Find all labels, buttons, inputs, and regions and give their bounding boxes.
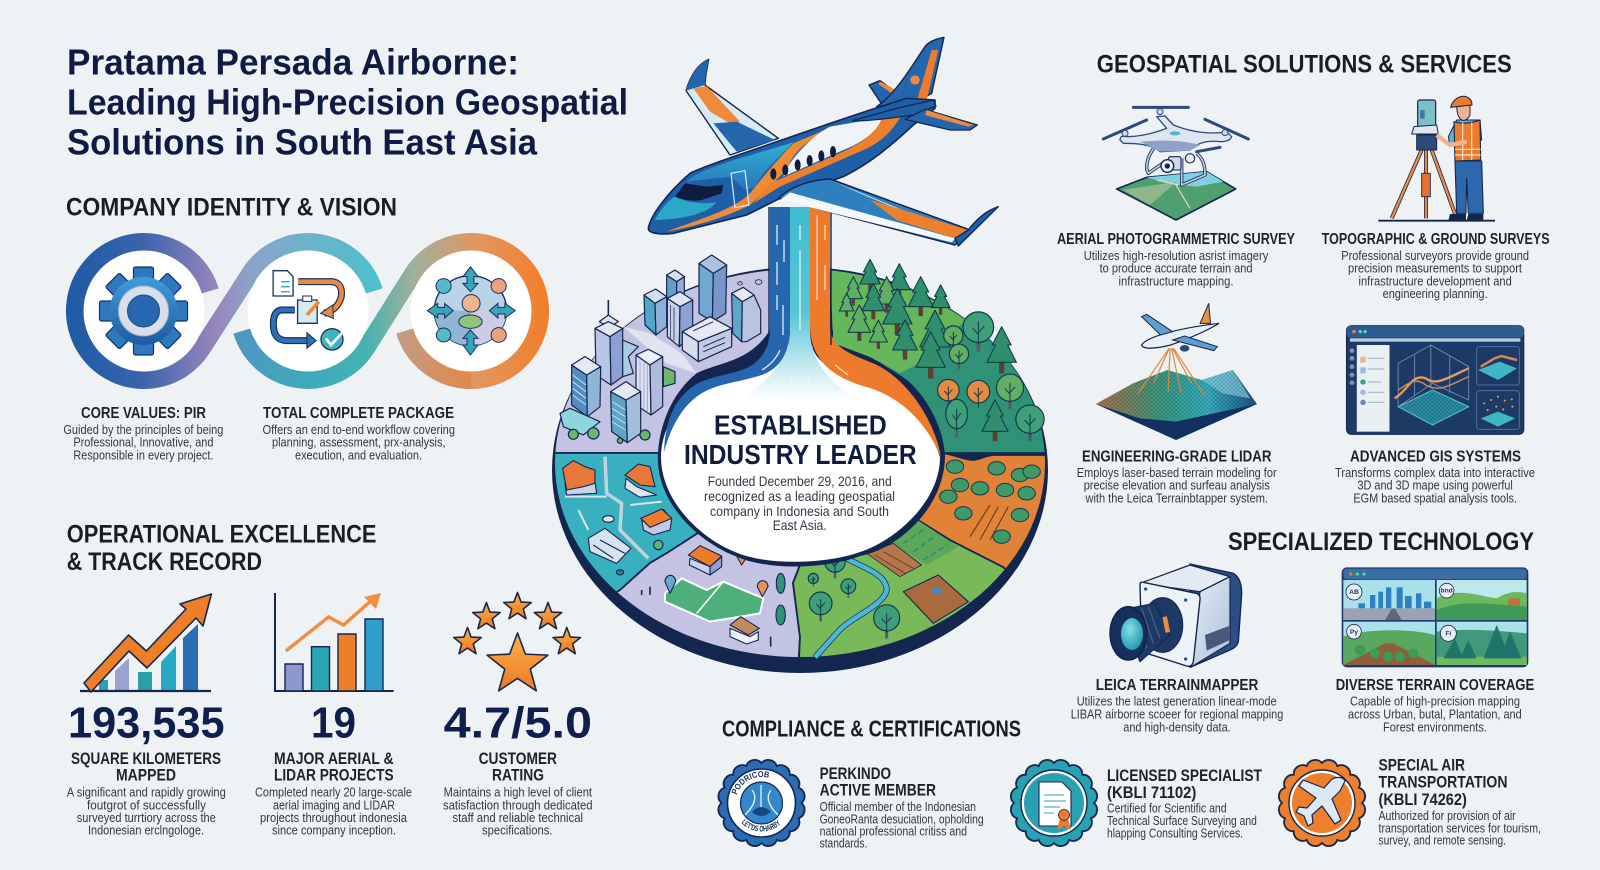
badge: special air transportation <box>1279 760 1365 846</box>
icon: four terrain scenes: AB <box>1349 589 1359 596</box>
text: established industry leader: East Asia. <box>773 517 827 533</box>
stat: customer rating: satisfaction through dedicated <box>443 798 593 812</box>
text: engineering lidar: Employs laser-based terrain modeling for <box>1077 466 1277 480</box>
stat: customer rating: RATING <box>492 766 544 785</box>
stat: square kilometers <box>67 698 226 838</box>
stat: square kilometers: surveyed turrtiory across the <box>77 811 216 825</box>
panel: company identity and vision <box>63 194 540 462</box>
stat: customer rating <box>443 698 593 838</box>
text: established industry leader <box>684 410 917 533</box>
text: established industry leader: company in Indonesia and South <box>710 503 889 519</box>
text: special air transportation: (KBLI 74262) <box>1378 790 1467 809</box>
icon: four terrain scenes <box>1342 567 1528 667</box>
text: engineering lidar: precise elevation and surfeau analysis <box>1084 479 1270 493</box>
text: leica terrainmapper: LEICA TERRAINMAPPER <box>1096 677 1259 694</box>
text: licensed specialist: Technical Surface Surveying and <box>1107 814 1257 828</box>
text: topographic surveys: precision measurements to support <box>1348 262 1522 276</box>
text: diverse terrain: Forest environments. <box>1383 721 1487 735</box>
text: licensed specialist: Certified for Scientific and <box>1107 802 1227 816</box>
panel: specialized technology <box>1071 528 1535 735</box>
text: established industry leader: INDUSTRY LEADER <box>684 439 917 470</box>
text: aerial photogrammetric <box>1057 231 1295 288</box>
panel: operational excellence <box>67 520 593 838</box>
text: licensed specialist: (KBLI 71102) <box>1107 783 1196 802</box>
stat: square kilometers: Indonesian erclngologe. <box>88 824 204 838</box>
stat: square kilometers: A significant and rapidly growing <box>67 786 226 800</box>
text: perkindo <box>820 764 984 851</box>
text: aerial photogrammetric: Utilizes high-resolution asrist imagery <box>1084 249 1269 263</box>
badge: perkindo <box>718 759 806 847</box>
icon: four terrain scenes: bnd <box>1441 588 1453 595</box>
stat: projects: since company inception. <box>272 824 396 838</box>
title: Pratama Persada Airborne: <box>67 41 519 82</box>
heading: operational excellence: OPERATIONAL EXCELLENCE <box>67 520 376 548</box>
text: GIS systems: 3D and 3D mape using powerful <box>1358 479 1513 493</box>
text: perkindo: PERKINDO <box>820 764 891 783</box>
stat: customer rating: specifications. <box>482 824 552 838</box>
text: GIS systems: EGM based spatial analysis tools. <box>1353 491 1517 505</box>
text: established industry leader: recognized as a leading geospatial <box>704 488 895 504</box>
text: special air transportation: SPECIAL AIR <box>1378 756 1465 775</box>
text: special air transportation <box>1378 756 1541 847</box>
text: diverse terrain: across Urban, butal, Plantation, and <box>1348 708 1522 722</box>
text: special air transportation: Authorized for provision of air <box>1378 809 1516 823</box>
text: perkindo: Official member of the Indonesian <box>820 800 976 814</box>
heading: operational excellence: & TRACK RECORD <box>67 548 262 576</box>
chart: project bars <box>275 593 394 691</box>
text: perkindo: ACTIVE MEMBER <box>820 781 936 800</box>
icon: gear <box>100 267 188 355</box>
ribbon of three linked rings <box>75 242 540 380</box>
suburb and teal segment <box>563 457 672 575</box>
text: diverse terrain: DIVERSE TERRAIN COVERAGE <box>1336 677 1535 694</box>
badge: perkindo: LET'DS OHARBY <box>741 819 780 832</box>
icon: workflow <box>273 271 345 350</box>
text: engineering lidar: with the Leica Terrainbtapper system. <box>1085 491 1268 505</box>
text: topographic surveys: infrastructure development and <box>1358 274 1512 288</box>
text: core values: Responsible in every project. <box>73 448 213 462</box>
center oval with rim <box>658 330 945 567</box>
text: core values <box>63 405 223 462</box>
text: special air transportation: TRANSPORTATION <box>1378 772 1508 791</box>
text: diverse terrain <box>1336 677 1535 735</box>
text: core values: Guided by the principles of being <box>63 423 223 437</box>
central illustration: terrain disc <box>540 37 1060 680</box>
stat: customer rating: 4.7/5.0 <box>444 698 592 747</box>
text: aerial photogrammetric: AERIAL PHOTOGRAMMETRIC SURVEY <box>1057 231 1295 248</box>
stat: square kilometers: 193,535 <box>68 698 225 747</box>
text: perkindo: GoneoRanta desuciation, opholding <box>820 812 984 826</box>
stat: projects: projects throughout indonesia <box>260 811 407 825</box>
badge: licensed specialist <box>1011 760 1097 846</box>
farmland segment <box>808 521 968 657</box>
text: total complete package: execution, and evaluation. <box>295 448 422 462</box>
text: established industry leader: ESTABLISHED <box>714 410 887 441</box>
text: leica terrainmapper: Utilizes the latest generation linear-mode <box>1077 695 1277 709</box>
text: diverse terrain: Capable of high-precision mapping <box>1350 695 1520 709</box>
runway ribbon <box>664 207 941 457</box>
text: total complete package: TOTAL COMPLETE PACKAGE <box>263 405 454 422</box>
stat: projects: aerial imaging and LIDAR <box>273 798 395 812</box>
text: GIS systems: ADVANCED GIS SYSTEMS <box>1350 448 1521 465</box>
text: special air transportation: transportation services for tourism, <box>1378 821 1541 835</box>
icon: camera <box>1110 564 1242 667</box>
stat: projects: 19 <box>311 698 356 747</box>
text: leica terrainmapper: LIBAR airborne scoeer for regional mapping <box>1071 708 1283 722</box>
icon: GIS dashboard <box>1346 326 1524 434</box>
text: GIS systems <box>1335 448 1535 505</box>
text: total complete package <box>262 405 455 462</box>
text: topographic surveys: Professional surveyors provide ground <box>1341 249 1529 263</box>
text: topographic surveys: engineering planning. <box>1383 287 1488 301</box>
lavender plots segment <box>642 546 785 647</box>
title: Solutions in South East Asia <box>67 121 538 162</box>
panel: compliance and certifications <box>718 716 1541 851</box>
heading: company identity: COMPANY IDENTITY & VISION <box>66 194 397 222</box>
text: leica terrainmapper: and high-density data. <box>1123 721 1231 735</box>
stat: square kilometers: MAPPED <box>116 766 176 785</box>
stat: projects: MAJOR AERIAL & <box>274 749 394 768</box>
city segment <box>560 255 762 443</box>
text: established industry leader: Founded December 29, 2016, and <box>708 473 892 489</box>
badge: perkindo: PODRICOB <box>732 771 769 794</box>
airplane <box>648 37 998 246</box>
stat: projects <box>255 698 412 838</box>
orchard segment <box>940 460 1040 543</box>
text: licensed specialist <box>1107 766 1262 841</box>
text: licensed specialist: hlapping Consulting Services. <box>1107 827 1243 841</box>
stat: square kilometers: SQUARE KILOMETERS <box>71 749 221 768</box>
title <box>67 41 628 162</box>
icon: four terrain scenes: Fi <box>1445 631 1451 638</box>
stat: customer rating: CUSTOMER <box>479 749 557 768</box>
text: core values: Professional, Innovative, and <box>73 436 213 450</box>
icon: rating stars <box>454 592 581 691</box>
text: engineering lidar: ENGINEERING-GRADE LIDAR <box>1082 448 1272 465</box>
icon: surveyor with tripod <box>1378 96 1495 221</box>
heading: operational excellence <box>67 520 376 576</box>
icon: drone over map <box>1103 107 1248 220</box>
text: perkindo: national professional critiss and <box>820 825 967 839</box>
stat: projects: LIDAR PROJECTS <box>274 766 394 785</box>
text: total complete package: Offers an end to-end workflow covering <box>262 423 455 437</box>
text: aerial photogrammetric: to produce accurate terrain and <box>1100 262 1253 276</box>
stat: customer rating: staff and reliable technical <box>452 811 583 825</box>
panel: geospatial solutions <box>1057 50 1550 505</box>
text: licensed specialist: LICENSED SPECIALIST <box>1107 766 1262 785</box>
text: special air transportation: survey, and remote sensing. <box>1378 833 1506 847</box>
stat: square kilometers: foutgrot of successfully <box>87 798 207 812</box>
text: aerial photogrammetric: infrastructure mapping. <box>1118 274 1234 288</box>
text: total complete package: planning, assessment, prx-analysis, <box>272 436 446 450</box>
chart: area growth <box>80 594 211 692</box>
stat: projects: Completed nearly 20 large-scale <box>255 786 412 800</box>
stat: customer rating: Maintains a high level of client <box>444 786 592 800</box>
text: leica terrainmapper <box>1071 677 1283 735</box>
heading: specialized technology: SPECIALIZED TECHNOLOGY <box>1228 528 1534 556</box>
text: GIS systems: Transforms complex data into interactive <box>1335 466 1535 480</box>
text: core values: CORE VALUES: PIR <box>81 405 206 422</box>
forest segment <box>839 259 1044 442</box>
heading: compliance: COMPLIANCE & CERTIFICATIONS <box>722 716 1021 742</box>
text: perkindo: standards. <box>820 837 867 851</box>
icon: stakeholders <box>427 267 515 355</box>
title: Leading High-Precision Geospatial <box>67 81 628 122</box>
icon: lidar plane and terrain <box>1096 303 1257 440</box>
icon: four terrain scenes: Py <box>1350 629 1358 636</box>
text: topographic surveys <box>1322 231 1550 301</box>
text: engineering lidar <box>1077 448 1277 505</box>
heading: geospatial solutions: GEOSPATIAL SOLUTIONS & SERVICES <box>1097 50 1512 78</box>
